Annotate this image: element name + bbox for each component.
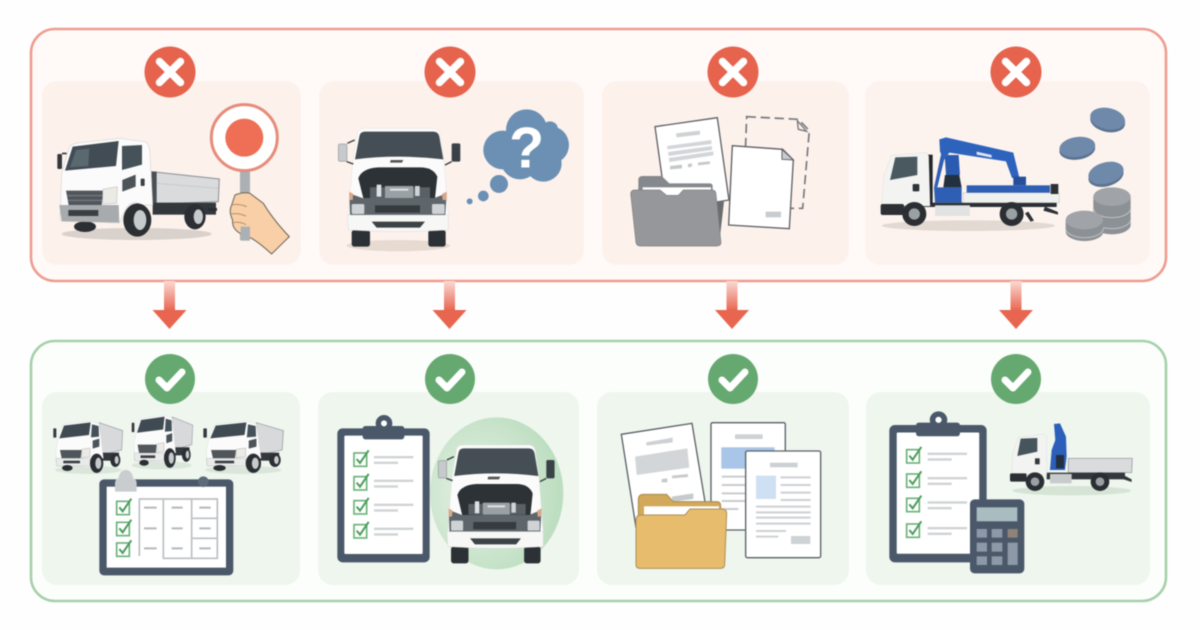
folder and documents [631,117,809,246]
panel: problems [31,29,1166,281]
card: engine checklist [318,354,579,585]
icon: check mark [991,354,1041,404]
card: crane truck cost [865,46,1150,265]
icon: check mark [708,354,758,404]
arrow 2 [432,281,466,329]
card: truck stopped [42,46,301,265]
card: engine unknown [319,46,584,265]
card: missing documents [602,46,849,265]
truck with shadow and stop sign [57,105,289,254]
icon: check mark [145,354,195,404]
arrow 3 [715,281,749,329]
icon: x mark [708,46,758,98]
panel: solutions [31,341,1166,601]
icon: x mark [144,46,196,98]
truck with open hood and question cloud: ? [509,116,544,180]
card: fleet inspection [42,354,300,585]
clipboard, calculator and crane truck [889,411,1132,573]
card: cost estimate [866,354,1150,585]
icon: x mark [990,46,1042,98]
icon: check mark [425,354,475,404]
card: organised documents [597,354,849,585]
folder and documents [621,423,821,568]
crane truck and coins [881,105,1131,241]
three trucks and table clipboard [53,415,283,575]
icon: x mark [424,46,476,98]
clipboard and truck on green circle [337,415,563,569]
arrow 4 [999,281,1033,329]
truck with open hood and question cloud [338,109,569,251]
arrow 1 [152,281,186,329]
